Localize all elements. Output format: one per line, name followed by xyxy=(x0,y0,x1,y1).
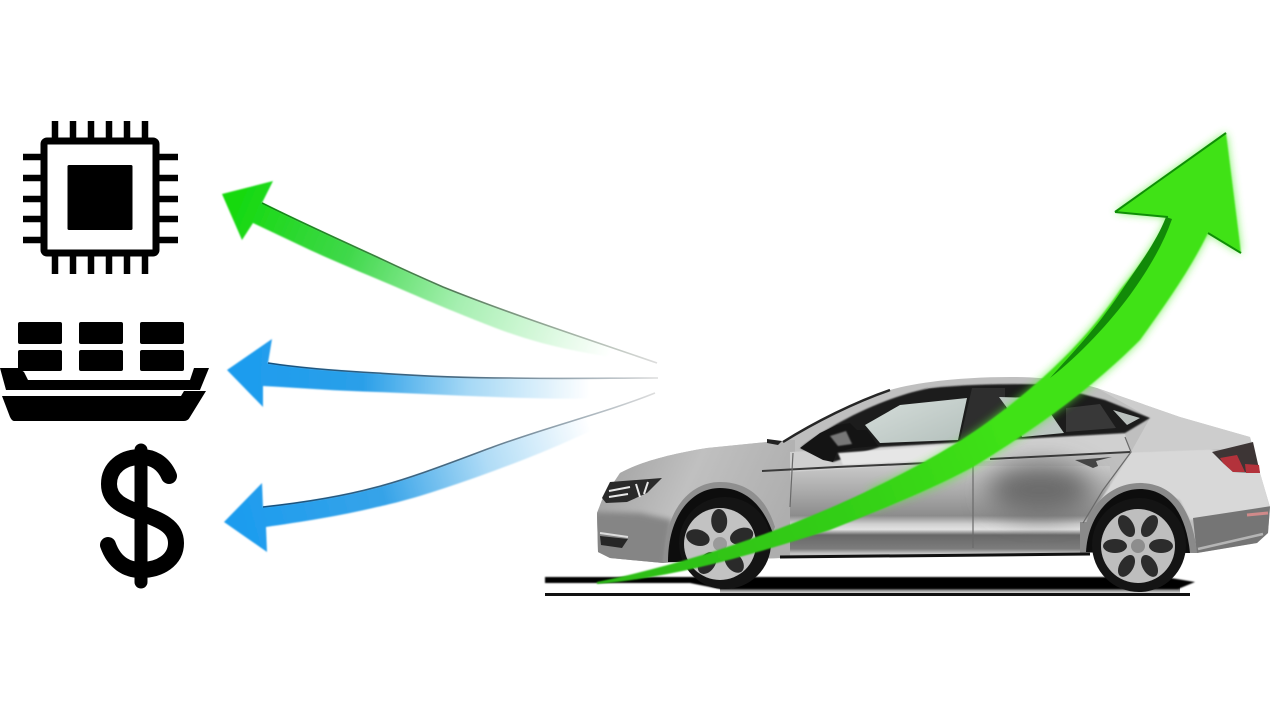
road with shadow xyxy=(545,577,1195,596)
quarter glass xyxy=(1113,410,1140,425)
icon: cargo ship xyxy=(0,322,209,421)
rear bumper chrome xyxy=(1198,534,1263,549)
car body shading xyxy=(590,370,1280,570)
reflector xyxy=(1247,513,1268,515)
front bumper xyxy=(597,510,672,563)
front window xyxy=(865,398,967,443)
infographic canvas xyxy=(0,121,1270,596)
arrow glow xyxy=(870,133,1241,510)
icon: dollar sign xyxy=(108,450,176,582)
front arch inner xyxy=(668,488,775,562)
arrow: blue to ship xyxy=(227,339,658,407)
car xyxy=(590,370,1280,592)
door handle xyxy=(1075,457,1112,468)
door shut lines xyxy=(790,437,1131,548)
front wheel arch xyxy=(664,482,775,562)
wiper xyxy=(767,439,782,445)
hood and fender xyxy=(590,440,795,565)
headlight xyxy=(602,478,662,503)
tail light xyxy=(1212,442,1260,473)
mirror reflection xyxy=(830,431,852,446)
rear interior xyxy=(1066,404,1116,432)
rear window xyxy=(999,397,1064,437)
front wheel xyxy=(679,497,771,589)
rear wheel arch xyxy=(1080,483,1197,553)
roof highlight xyxy=(800,384,1040,448)
rear arch inner xyxy=(1086,489,1190,553)
rear wheel xyxy=(1092,498,1186,592)
windshield rail xyxy=(783,390,890,442)
door bottom behind rear wheel xyxy=(1080,522,1093,553)
door top highlight xyxy=(838,444,960,465)
rear bumper xyxy=(1193,506,1272,556)
rear door shadow xyxy=(988,464,1092,516)
arrow fill xyxy=(597,133,1241,584)
C pillar and trunk lid xyxy=(1097,388,1254,452)
front grille xyxy=(600,536,628,548)
sill line xyxy=(780,554,1090,557)
arrow: green to chip xyxy=(222,181,657,363)
wing mirror xyxy=(800,423,878,462)
door shoulder xyxy=(790,434,1131,472)
arrow: blue to dollar xyxy=(224,393,655,552)
icon: microchip xyxy=(23,121,178,274)
window surround xyxy=(800,384,1150,462)
arrow dark edges xyxy=(1115,133,1241,253)
arrow shaft shadow xyxy=(1050,217,1172,378)
rear quarter panel xyxy=(1100,450,1270,520)
doors xyxy=(790,466,1110,561)
character line xyxy=(762,452,1130,471)
B pillar xyxy=(960,388,1005,440)
big rising green arrow xyxy=(597,133,1241,584)
